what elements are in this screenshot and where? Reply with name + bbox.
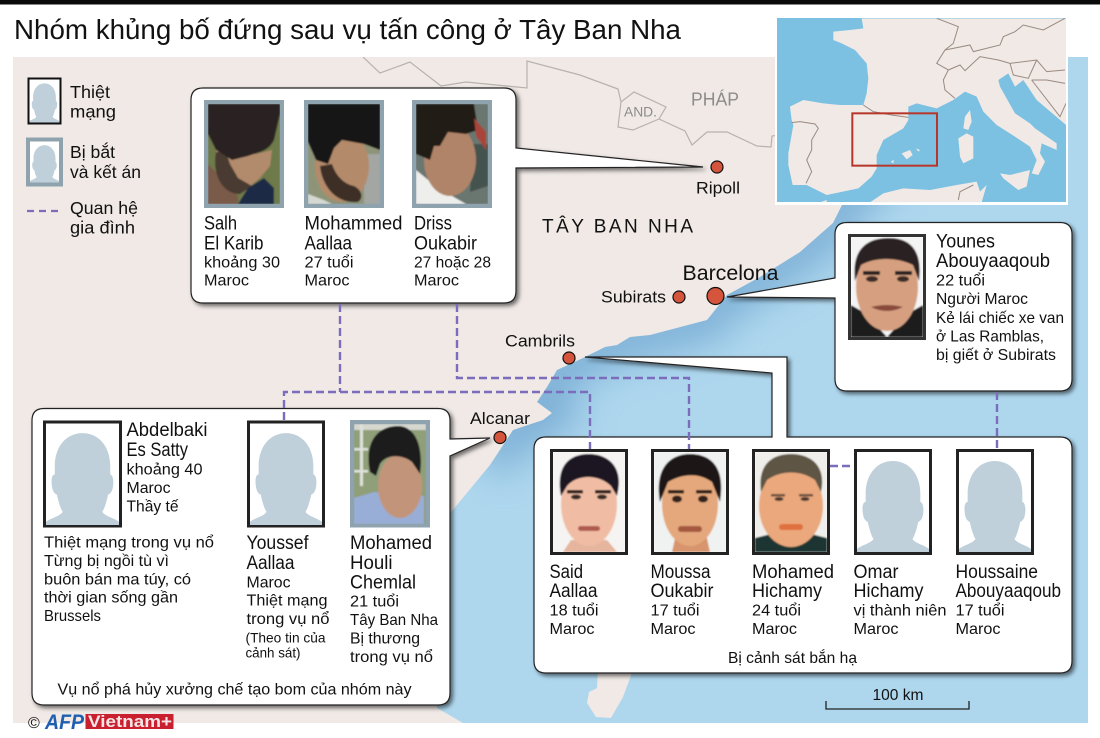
person: Mohamed Hichamy: Hichamy	[752, 581, 822, 602]
map label: TÂY BAN NHA: TÂY BAN NHA	[542, 216, 693, 238]
person: Mohamed Hichamy: 24 tuổi	[752, 602, 801, 620]
person: Mohammed Aallaa: Aallaa	[304, 234, 352, 254]
location: Alcanar	[470, 409, 530, 444]
person: Youssef Aallaa	[246, 422, 330, 660]
person: Mohamed Hichamy	[752, 450, 834, 638]
land: Spain and France	[13, 57, 842, 723]
title: Nhóm khủng bố đứng sau vụ tấn công ở Tây Ban Nha	[14, 14, 682, 45]
person: Moussa Oukabir: Moussa	[650, 562, 711, 583]
person: Salh El Karib: Maroc	[204, 272, 249, 290]
person: Mohamed Houli Chemlal: 21 tuổi	[350, 592, 399, 610]
person: Mohamed Hichamy: Mohamed	[752, 562, 834, 583]
caption: bomb workshop: Vụ nổ phá hủy xưởng chế tạo bom của nhóm này	[58, 680, 412, 698]
person: Moussa Oukabir: Oukabir	[650, 581, 714, 602]
person: Youssef Aallaa: trong vụ nổ	[246, 610, 330, 628]
person: Moussa Oukabir: 17 tuổi	[650, 602, 700, 620]
person: Abdelbaki Es Satty: Thiệt mạng trong vụ nổ	[44, 534, 214, 552]
person: Abdelbaki Es Satty: thời gian sống gần	[44, 590, 178, 606]
person: Said Aallaa	[550, 450, 626, 638]
map label: PHÁP: PHÁP	[691, 90, 739, 110]
person: Said Aallaa: Said	[550, 562, 583, 583]
person: Omar Hichamy: vị thành niên	[854, 602, 946, 620]
person: Abdelbaki Es Satty: Từng bị ngồi tù vì	[44, 553, 169, 570]
person: Mohammed Aallaa	[304, 100, 402, 290]
location: Ripoll: Ripoll	[696, 178, 740, 198]
legend: arrested label line 2: và kết án	[70, 162, 141, 182]
person: Salh El Karib: El Karib	[204, 234, 264, 254]
person: Omar Hichamy: Omar	[854, 562, 899, 583]
person: Mohammed Aallaa: 27 tuổi	[304, 254, 354, 272]
person: Houssaine Abouyaaqoub: 17 tuổi	[956, 602, 1004, 620]
person: Houssaine Abouyaaqoub	[956, 450, 1061, 638]
map label: AND.: AND.	[624, 104, 657, 120]
person: Abdelbaki Es Satty: Brussels	[44, 608, 101, 625]
person: Youssef Aallaa: Aallaa	[246, 553, 295, 574]
legend	[27, 78, 141, 238]
person: Mohamed Houli Chemlal: Chemlal	[350, 572, 416, 594]
scale bar: 100 km: 100 km	[872, 687, 924, 704]
photo: Younes	[850, 236, 924, 338]
top black bar	[0, 0, 1100, 4]
person: Driss Oukabir: Maroc	[414, 272, 459, 290]
person: Mohamed Houli Chemlal: Bị thương	[350, 630, 420, 648]
person: Said Aallaa: Maroc	[550, 621, 594, 638]
text: Younes details	[936, 232, 1064, 364]
person: Youssef Aallaa: cảnh sát)	[246, 644, 300, 660]
person: Abdelbaki Es Satty: buôn bán ma túy, có	[44, 572, 191, 588]
person: Omar Hichamy: Maroc	[854, 621, 898, 638]
scale bar: 100 km	[826, 687, 969, 709]
legend: arrested label: Bị bắt	[70, 141, 115, 162]
person: Omar Hichamy	[854, 450, 946, 638]
text: Younes details: bị giết ở Subirats	[936, 347, 1056, 364]
location: Cambrils	[505, 332, 575, 364]
legend: killed label line 2: mạng	[70, 102, 116, 122]
panel: Younes Abouyaaqoub	[727, 222, 1072, 391]
person: Mohamed Hichamy: Maroc	[752, 621, 797, 638]
person: Driss Oukabir	[412, 100, 492, 290]
person: Salh El Karib	[204, 100, 284, 290]
person: Driss Oukabir: Oukabir	[414, 234, 478, 254]
person: Driss Oukabir: 27 hoặc 28	[414, 254, 491, 272]
person: Abdelbaki Es Satty: Maroc	[126, 480, 170, 497]
person: Houssaine Abouyaaqoub: Houssaine	[956, 562, 1038, 583]
person: Abdelbaki Es Satty: Thầy tế	[126, 498, 179, 516]
legend: family label: Quan hệ	[70, 198, 138, 218]
legend: killed label: Thiệt	[70, 82, 110, 102]
legend: killed icon	[28, 78, 60, 124]
location: Barcelona	[682, 262, 779, 304]
text: Younes details: 22 tuổi	[936, 272, 985, 290]
land: Ibiza	[587, 674, 632, 718]
person: Youssef Aallaa: Youssef	[246, 533, 309, 554]
person: Moussa Oukabir	[650, 450, 728, 638]
person: Salh El Karib: Salh	[204, 214, 237, 234]
person: Houssaine Abouyaaqoub: Maroc	[956, 621, 1000, 638]
person: Mohamed Houli Chemlal: Tây Ban Nha	[350, 612, 438, 629]
person: Mohamed Houli Chemlal: trong vụ nổ	[350, 648, 433, 666]
person: Abdelbaki Es Satty: khoảng 40	[126, 462, 203, 478]
person: Said Aallaa: Aallaa	[550, 581, 598, 602]
text: Younes details: Người Maroc	[936, 291, 1028, 308]
person: Abdelbaki Es Satty: Abdelbaki	[126, 420, 208, 441]
panel: Ripoll group	[191, 88, 703, 303]
person: Salh El Karib: khoảng 30	[204, 254, 280, 272]
person: Youssef Aallaa: (Theo tin của	[246, 630, 326, 646]
person: Moussa Oukabir: Maroc	[650, 621, 696, 638]
person: Mohammed Aallaa: Mohammed	[304, 214, 402, 234]
caption: shot by police: Bị cảnh sát bắn hạ	[728, 648, 857, 667]
borders: France, Andorra	[363, 57, 780, 147]
person: Youssef Aallaa: Thiệt mạng	[246, 592, 328, 610]
location: Alcanar: Alcanar	[470, 409, 530, 428]
location: Subirats: Subirats	[601, 288, 666, 306]
legend: family dash	[27, 210, 58, 212]
person: Mohammed Aallaa: Maroc	[304, 272, 350, 290]
inset locator map	[775, 17, 1068, 205]
family relation dashed lines	[284, 304, 997, 466]
credit logo: AFP Vietnam+: ©	[28, 715, 40, 732]
credit logo: AFP Vietnam+: Vietnam+	[88, 713, 172, 731]
legend: family label line 2: gia đình	[70, 218, 135, 238]
person: Youssef Aallaa: Maroc	[246, 574, 290, 592]
person: Mohamed Houli Chemlal: Houli	[350, 553, 392, 574]
text: Younes details: Abouyaaqoub	[936, 251, 1050, 272]
person: Houssaine Abouyaaqoub: Abouyaaqoub	[956, 581, 1061, 602]
credit logo: AFP Vietnam+	[28, 711, 174, 734]
panel: Cambrils group	[534, 357, 1072, 673]
panel: Alcanar group	[32, 408, 490, 705]
person: Abdelbaki Es Satty: Es Satty	[126, 440, 188, 461]
location: Ripoll	[696, 161, 740, 198]
legend: arrested icon	[28, 140, 61, 184]
text: Younes details: Younes	[936, 232, 995, 252]
person: Abdelbaki Es Satty	[44, 420, 214, 625]
location: Barcelona: Barcelona	[682, 262, 779, 285]
credit logo: AFP Vietnam+: AFP	[44, 711, 85, 734]
person: Mohamed Houli Chemlal: Mohamed	[350, 533, 432, 554]
person: Said Aallaa: 18 tuổi	[550, 602, 598, 620]
person: Omar Hichamy: Hichamy	[854, 581, 924, 602]
person: Mohamed Houli Chemlal	[350, 420, 438, 666]
text: Younes details: Kẻ lái chiếc xe van	[936, 310, 1064, 327]
person: Driss Oukabir: Driss	[414, 214, 452, 234]
location: Cambrils: Cambrils	[505, 332, 575, 350]
text: Younes details: ở Las Ramblas,	[936, 328, 1044, 346]
